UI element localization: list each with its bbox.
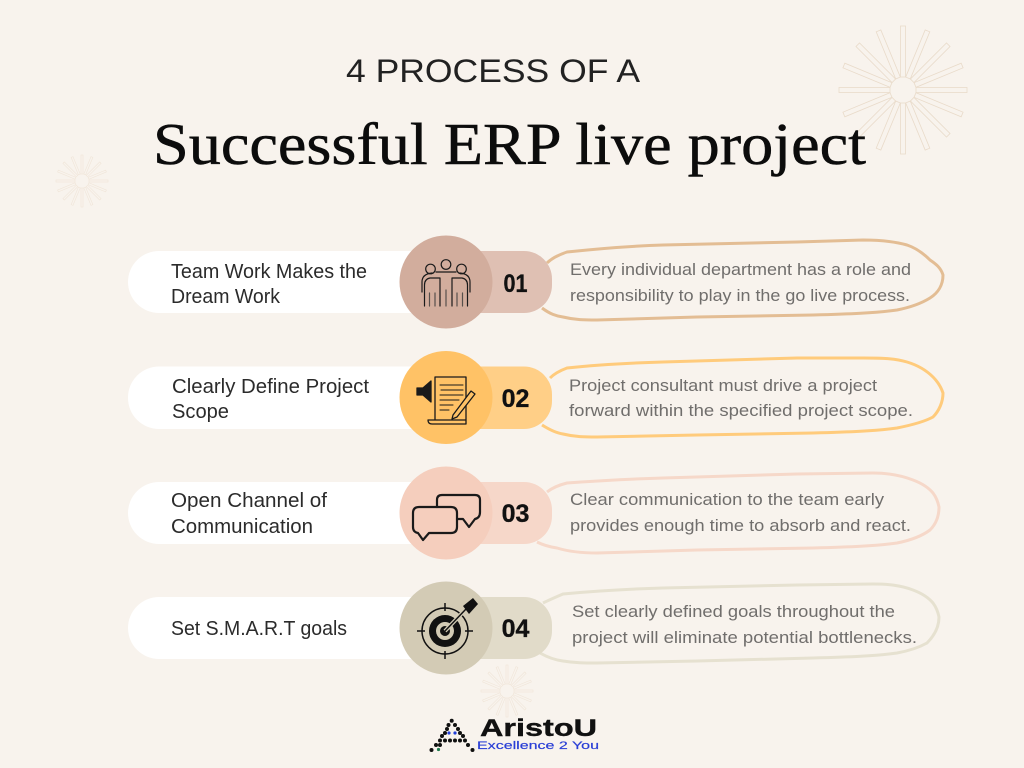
text: step 04 description: project will eliminate potential bottlenecks.	[572, 628, 917, 647]
outline: step 01 description	[542, 240, 943, 320]
number pill	[440, 251, 552, 313]
outline: step 02 description	[542, 358, 943, 437]
outline: step 03 description	[537, 473, 939, 553]
decorative sunburst: bottom	[481, 665, 533, 717]
icon circle	[400, 582, 492, 674]
title pill	[128, 251, 458, 313]
number 04: 04	[502, 615, 529, 643]
text: step 02 description: forward within the specified project scope.	[569, 401, 913, 420]
text: step 03 description: Clear communication to the team early	[570, 490, 885, 509]
number pill	[440, 366, 552, 429]
heading: step 02: Scope	[172, 401, 229, 423]
text: step 04 description: Set clearly defined goals throughout the	[572, 602, 895, 621]
text: step 01 description: Every individual department has a role and	[570, 260, 911, 279]
heading: step 03: Open Channel of	[171, 490, 327, 512]
panel: step 01 team work	[128, 236, 943, 328]
heading: step 04: Set S.M.A.R.T goals	[171, 618, 347, 640]
title pill	[128, 482, 458, 544]
text: step 02 description: Project consultant must drive a project	[569, 376, 877, 395]
icon: team of people	[422, 260, 470, 306]
heading: step 01: Team Work Makes the	[171, 261, 367, 283]
panel: step 02 project scope	[128, 351, 943, 444]
decorative sunburst: left	[56, 155, 108, 207]
logo tagline: Excellence 2 You	[477, 740, 599, 752]
number pill	[440, 597, 552, 659]
text: step 01 description: responsibility to play in the go live process.	[570, 286, 910, 305]
title: successful ERP live project: Successful ERP live project	[153, 111, 867, 177]
icon circle	[400, 351, 492, 444]
panel: step 04 smart goals	[128, 582, 939, 674]
heading: step 02: Clearly Define Project	[172, 376, 369, 398]
logo wordmark: AristoU	[480, 715, 597, 742]
icon: target with arrow	[417, 598, 478, 659]
number 01: 01	[504, 270, 528, 298]
icon: speech bubbles	[413, 495, 480, 540]
logo mark: dotted triangle	[430, 719, 474, 752]
number pill	[440, 482, 552, 544]
number 02: 02	[502, 385, 529, 413]
heading: 4 process of a: 4 PROCESS OF A	[346, 53, 641, 89]
heading: step 01: Dream Work	[171, 286, 281, 308]
title pill	[128, 366, 458, 429]
icon circle	[400, 236, 492, 328]
heading: step 03: Communication	[171, 516, 313, 538]
outline: step 04 description	[540, 584, 939, 663]
text: step 03 description: provides enough time to absorb and react.	[570, 516, 911, 535]
icon circle	[400, 466, 492, 560]
icon: document with pen and speaker	[417, 377, 475, 424]
decorative sunburst: top right	[839, 26, 967, 154]
number 03: 03	[502, 500, 529, 528]
logo: AristoU	[430, 715, 599, 752]
title pill	[128, 597, 458, 659]
panel: step 03 communication	[128, 466, 939, 560]
